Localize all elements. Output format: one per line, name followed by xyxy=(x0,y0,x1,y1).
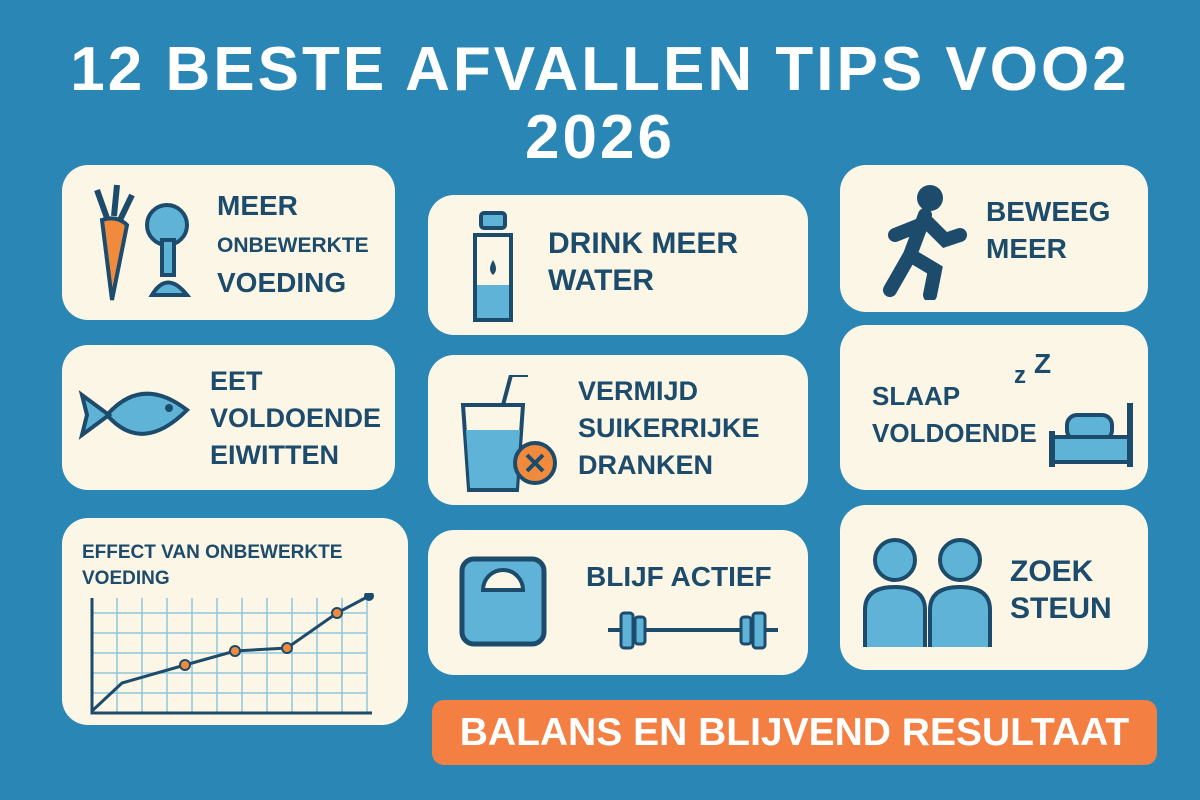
icon: scale xyxy=(460,556,546,646)
text: WATER xyxy=(548,264,654,297)
text: VOEDING xyxy=(217,267,346,298)
icon: bed zz: z xyxy=(1014,362,1026,389)
text xyxy=(210,366,381,470)
text: SUIKERRIJKE xyxy=(578,413,760,443)
text: ONBEWERKTE xyxy=(217,234,369,257)
icon: bottle xyxy=(473,211,513,322)
panel: eiwitten xyxy=(62,345,395,490)
chart title: EFFECT VAN ONBEWERKTE xyxy=(82,542,342,563)
icon: glass with x xyxy=(460,375,557,492)
icon: carrot broccoli xyxy=(94,184,192,300)
text: DRINK MEER xyxy=(548,227,738,260)
text: MEER xyxy=(986,233,1067,264)
panel: blijf actief xyxy=(428,530,808,675)
text: VOLDOENDE xyxy=(872,418,1037,448)
panel: chart xyxy=(62,518,408,725)
text: VERMIJD xyxy=(578,376,698,406)
line chart xyxy=(90,593,374,714)
text xyxy=(217,190,369,298)
icon: runner xyxy=(883,185,967,300)
text: DRANKEN xyxy=(578,450,713,480)
text xyxy=(578,376,760,480)
text xyxy=(872,381,1037,448)
icon: fish xyxy=(78,390,190,440)
text: SLAAP xyxy=(872,381,960,411)
text: BLIJF ACTIEF xyxy=(586,561,772,592)
text: STEUN xyxy=(1010,592,1112,625)
panel: water xyxy=(428,195,808,335)
icon: people xyxy=(863,538,992,647)
text xyxy=(548,227,738,297)
chart title xyxy=(82,542,342,589)
text xyxy=(986,196,1110,264)
icon: bed zz xyxy=(1014,353,1133,467)
banner xyxy=(432,700,1157,765)
text xyxy=(1010,555,1112,625)
text: EIWITTEN xyxy=(210,440,339,470)
title: 12 BESTE AFVALLEN TIPS VOO2 xyxy=(70,35,1130,104)
panel: zoek steun xyxy=(840,505,1148,670)
panel: slaap xyxy=(840,325,1148,490)
text: BEWEEG xyxy=(986,196,1110,227)
banner: BALANS EN BLIJVEND RESULTAAT xyxy=(460,711,1129,754)
text: EET xyxy=(210,366,263,396)
text: ZOEK xyxy=(1010,555,1093,588)
text: VOLDOENDE xyxy=(210,403,381,433)
panel: suikerrijke dranken xyxy=(428,355,808,505)
title xyxy=(70,35,1130,172)
text: MEER xyxy=(217,190,298,221)
icon: dumbbell xyxy=(608,612,778,650)
panel: beweeg xyxy=(840,165,1148,312)
panel: onbewerkte voeding xyxy=(62,165,395,320)
chart title: VOEDING xyxy=(82,568,170,589)
title: 2026 xyxy=(525,103,675,172)
